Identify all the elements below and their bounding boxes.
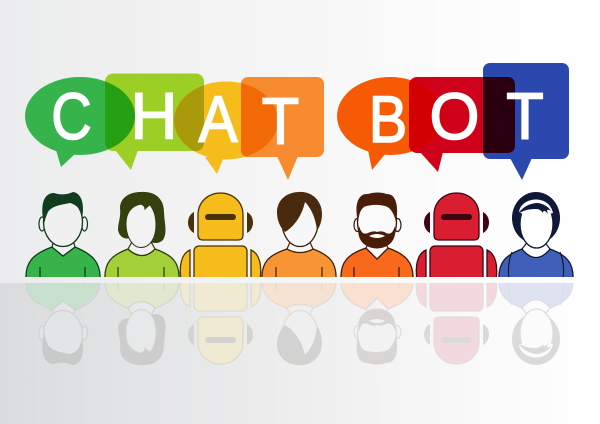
reflection: orange shirt woman <box>262 277 336 365</box>
speech bubbles: CHAT <box>25 74 324 180</box>
bubble: red <box>409 77 515 172</box>
reflection: blue shirt woman <box>499 277 573 365</box>
overlap: red and blue <box>483 77 515 153</box>
letter B: B <box>369 82 407 156</box>
overlap: yellow and orange <box>241 83 277 156</box>
speech bubbles: BOT <box>337 63 569 180</box>
background wall <box>0 0 600 277</box>
person: bearded man <box>341 192 413 280</box>
floor reflection of characters <box>26 283 574 365</box>
person: lime shirt woman <box>105 192 179 280</box>
heading: CHAT <box>51 78 299 158</box>
bubble: yellow <box>174 82 278 174</box>
letter H: H <box>130 78 178 152</box>
reflection: green shirt man <box>26 277 100 365</box>
bubble: blue <box>483 63 569 180</box>
overlap: green and lime <box>105 81 135 150</box>
letter O: O <box>430 79 480 153</box>
bubble: green <box>25 77 135 167</box>
row of characters <box>26 192 573 286</box>
person: blue shirt woman <box>499 192 573 280</box>
person: green shirt man <box>26 192 100 280</box>
reflective floor <box>0 277 600 424</box>
robot: red <box>416 193 497 286</box>
lighter strip at the floor edge <box>0 277 600 283</box>
overlap: orange and red <box>409 80 443 152</box>
heading: BOT <box>369 79 544 156</box>
letter A: A <box>198 82 238 156</box>
letter C: C <box>51 79 92 153</box>
reflection: red robot <box>416 283 498 364</box>
reflection: lime shirt woman <box>105 277 179 365</box>
overlap: lime and yellow <box>174 85 204 151</box>
person: orange shirt woman <box>262 192 336 280</box>
letter T: T <box>506 79 544 153</box>
bubble: lime <box>105 74 204 170</box>
reflection: bearded man <box>341 277 413 364</box>
robot: yellow <box>180 193 261 286</box>
reflection: yellow robot <box>180 283 262 364</box>
bubble: orange <box>241 77 324 180</box>
letter T: T <box>262 84 299 158</box>
bubble: dark orange <box>337 77 443 170</box>
